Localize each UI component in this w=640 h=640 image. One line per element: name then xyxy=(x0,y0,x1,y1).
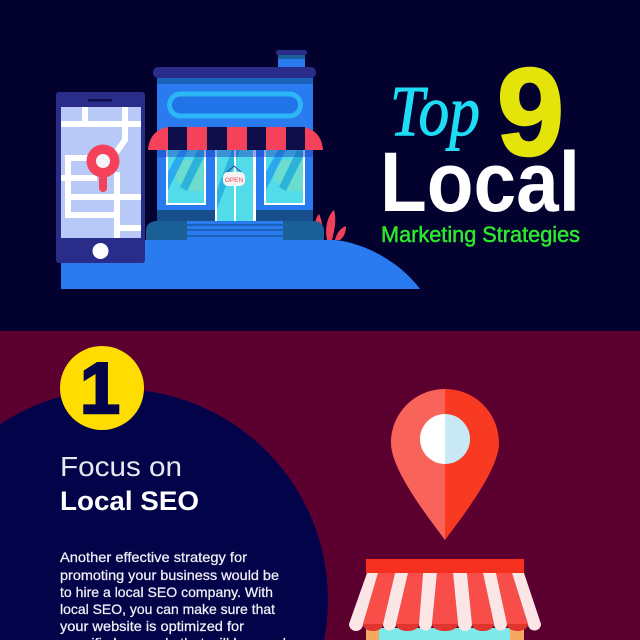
white stripes xyxy=(349,573,541,631)
number badge xyxy=(60,346,144,430)
right planter xyxy=(283,221,324,240)
roof xyxy=(153,67,316,78)
panel: strategy 1 xyxy=(0,331,640,640)
store wall xyxy=(157,76,313,222)
body text: local SEO, you can make sure that xyxy=(60,601,275,617)
speaker xyxy=(88,99,112,102)
awning bar xyxy=(366,559,524,573)
heading: Local SEO xyxy=(60,486,199,516)
open sign xyxy=(223,166,245,186)
panel: header xyxy=(0,0,640,331)
illustration: red plant xyxy=(315,210,346,240)
heading: Focus on xyxy=(60,451,182,482)
shadow under awning xyxy=(157,150,313,157)
chimney xyxy=(276,50,307,68)
navy circle backdrop xyxy=(0,389,328,640)
map screen xyxy=(61,107,141,238)
right window xyxy=(264,150,305,205)
awning scallop shadows xyxy=(363,624,528,631)
map pin xyxy=(86,144,120,192)
icon: location pin xyxy=(391,389,499,540)
awning xyxy=(148,127,323,150)
home button xyxy=(92,243,108,259)
door xyxy=(215,150,256,222)
illustration: ground xyxy=(61,240,420,289)
neon sign xyxy=(170,94,300,116)
body text: promoting your business would be xyxy=(60,567,279,583)
red stripes xyxy=(363,573,528,631)
subtitle: Marketing Strategies xyxy=(381,222,580,247)
body text: your website is optimized for xyxy=(60,618,244,634)
open sign: OPEN xyxy=(225,177,244,184)
title block xyxy=(380,44,580,247)
body text xyxy=(60,549,286,640)
body text: Another effective strategy for xyxy=(60,549,247,565)
shop wall xyxy=(366,628,524,640)
illustration: store building xyxy=(146,50,324,240)
illustration: smartphone with map xyxy=(56,92,145,263)
title: Top: Top xyxy=(390,71,480,151)
phone body xyxy=(56,92,145,263)
steps xyxy=(187,221,283,240)
body text: to hire a local SEO company. With xyxy=(60,584,273,600)
illustration: shop with striped awning xyxy=(349,559,541,640)
shop base xyxy=(157,210,313,222)
heading xyxy=(60,451,199,516)
left planter xyxy=(146,221,187,240)
left window xyxy=(166,150,206,205)
title: 9: 9 xyxy=(497,44,564,182)
title: Local: Local xyxy=(380,135,580,229)
number badge: 1 xyxy=(80,349,120,429)
